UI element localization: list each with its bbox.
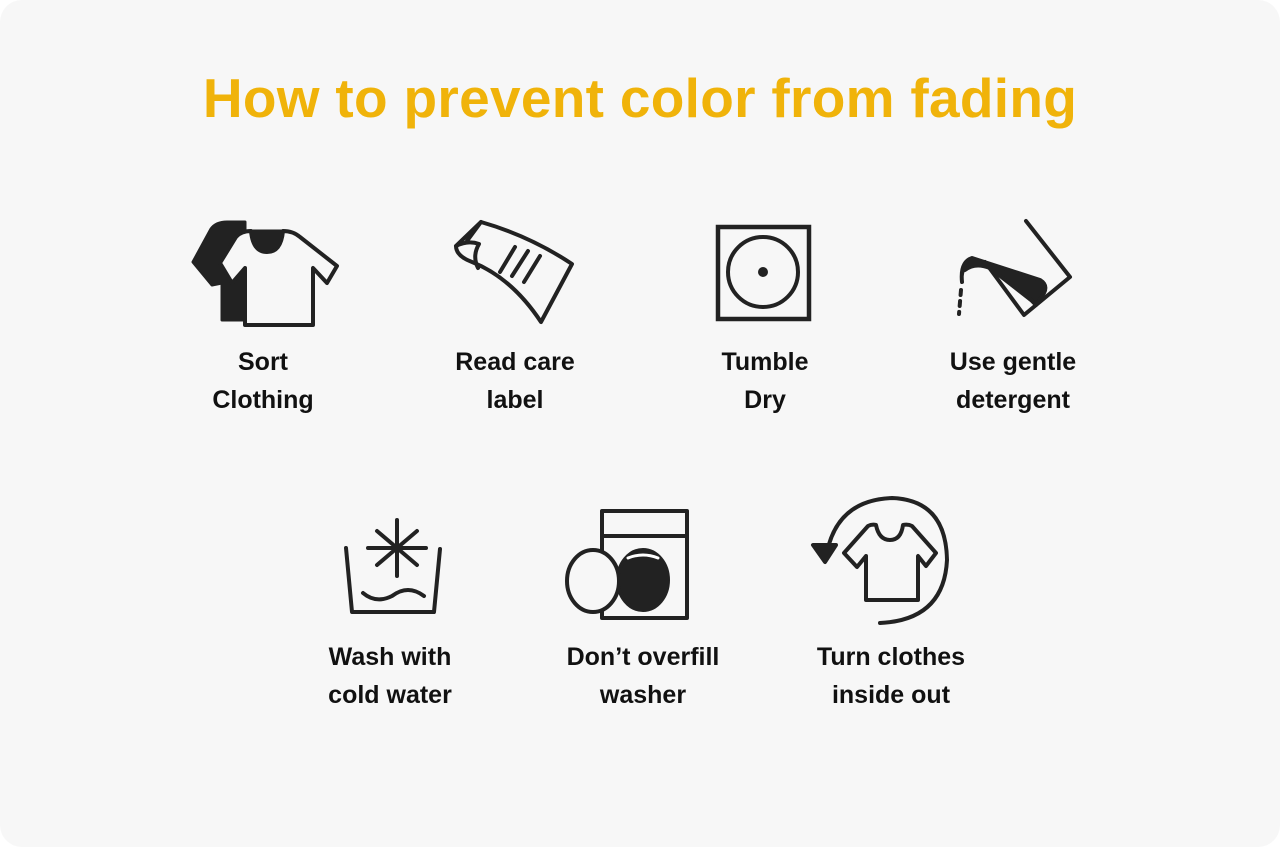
label: sort clothing: Clothing xyxy=(212,386,314,414)
icon: wash with cold water xyxy=(346,520,440,612)
icon: don't overfill washer xyxy=(567,511,687,618)
label: tumble dry: Tumble xyxy=(721,348,809,376)
label: gentle detergent xyxy=(950,348,1076,414)
label: cold water xyxy=(328,643,452,709)
label: inside out: inside out xyxy=(832,681,950,709)
label: cold water: cold water xyxy=(328,681,452,709)
icon: gentle detergent xyxy=(959,221,1070,315)
label: gentle detergent: Use gentle xyxy=(950,348,1076,376)
icon: sort clothing xyxy=(193,222,337,325)
label: inside out xyxy=(817,643,965,709)
label: read care label: label xyxy=(486,386,543,414)
title: How to prevent color from fading xyxy=(203,67,1077,129)
label: read care label: Read care xyxy=(455,348,575,376)
label: gentle detergent: detergent xyxy=(956,386,1070,414)
label: sort clothing: Sort xyxy=(238,348,288,376)
label: sort clothing xyxy=(212,348,314,414)
icon: turn clothes inside out xyxy=(813,498,947,623)
label: overfill xyxy=(567,643,719,709)
icon: tumble dry xyxy=(718,227,809,319)
label: cold water: Wash with xyxy=(329,643,451,671)
label: overfill: Don’t overfill xyxy=(567,643,719,671)
label: overfill: washer xyxy=(600,681,686,709)
label: read care label xyxy=(455,348,575,414)
icon: care label xyxy=(456,222,572,322)
label: inside out: Turn clothes xyxy=(817,643,965,671)
label: tumble dry xyxy=(721,348,809,414)
label: tumble dry: Dry xyxy=(744,386,786,414)
